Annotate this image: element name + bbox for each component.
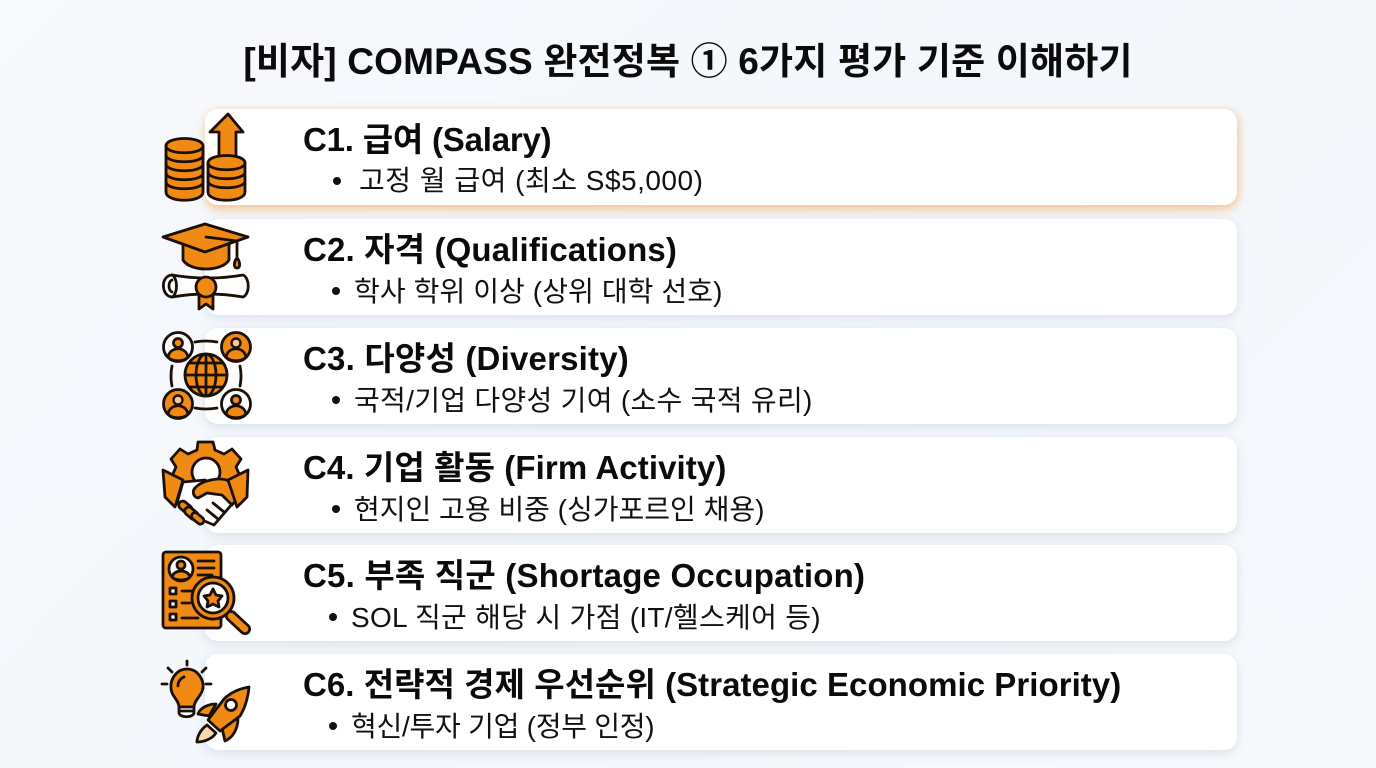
- icon: resume with magnifier: [163, 552, 245, 629]
- heading: C3: C3. 다양성 (Diversity): [303, 340, 629, 377]
- panel: C6 strategic economic priority: [205, 654, 1237, 750]
- text: C2 detail: 학사 학위 이상 (상위 대학 선호): [354, 276, 723, 307]
- bullet marker: C6: [329, 722, 337, 730]
- text: C4 detail: 현지인 고용 비중 (싱가포르인 채용): [354, 494, 764, 525]
- icon: globe and people: [164, 332, 250, 418]
- text: C6 detail: 혁신/투자 기업 (정부 인정): [351, 711, 654, 742]
- bullet marker: C5: [329, 613, 337, 621]
- panel: C3 diversity: [205, 328, 1237, 424]
- panel: C1 salary: [205, 109, 1237, 205]
- icon: coins and arrow: [166, 114, 245, 200]
- heading: C1: C1. 급여 (Salary): [303, 121, 551, 158]
- heading: C4: C4. 기업 활동 (Firm Activity): [303, 449, 726, 486]
- icon: gear and handshake: [163, 442, 248, 526]
- text: C3 detail: 국적/기업 다양성 기여 (소수 국적 유리): [354, 385, 813, 416]
- text: C1 detail: 고정 월 급여 (최소 S$5,000): [359, 165, 703, 196]
- heading: C2: C2. 자격 (Qualifications): [303, 231, 677, 268]
- bullet marker: C3: [332, 396, 340, 404]
- panel: C4 firm activity: [205, 437, 1237, 533]
- text: C5 detail: SOL 직군 해당 시 가점 (IT/헬스케어 등): [351, 602, 821, 633]
- heading: C6: C6. 전략적 경제 우선순위 (Strategic Economic Priority): [303, 666, 1121, 703]
- heading: C5: C5. 부족 직군 (Shortage Occupation): [303, 557, 865, 594]
- icon: light bulb and rocket: [162, 661, 249, 742]
- bullet marker: C4: [332, 505, 340, 513]
- bullet marker: C2: [332, 287, 340, 295]
- title: [비자] COMPASS 완전정복 ① 6가지 평가 기준 이해하기: [243, 41, 1133, 82]
- bullet marker: C1: [333, 177, 341, 185]
- panel: C5 shortage occupation: [205, 545, 1237, 641]
- icon: graduation cap and diploma: [163, 224, 248, 309]
- panel: C2 qualifications: [205, 219, 1237, 315]
